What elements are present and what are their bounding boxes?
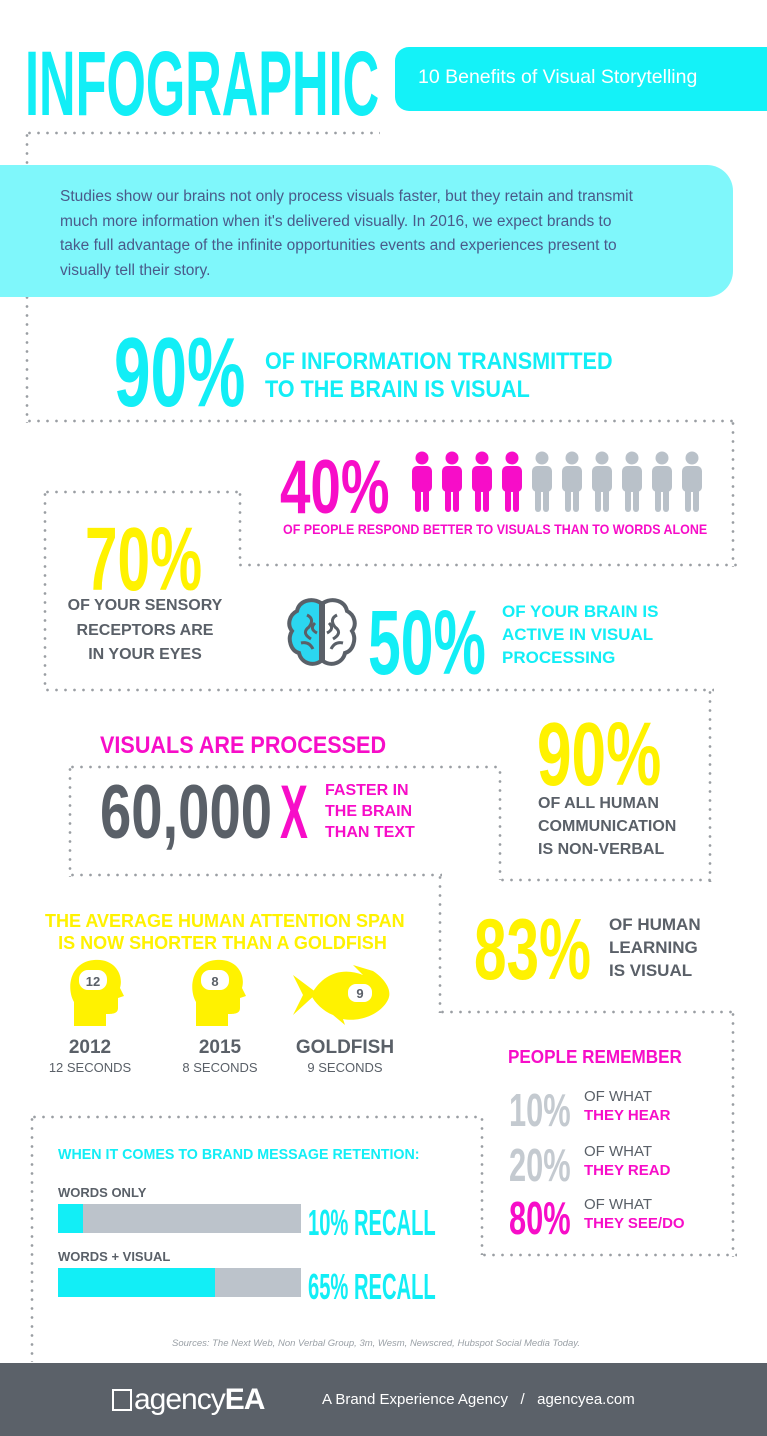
stat 60,000x: X [280, 770, 308, 855]
stat 83% [474, 902, 701, 998]
intro panel [0, 165, 733, 297]
stat 40% people [280, 445, 707, 537]
heading: attention span [45, 911, 405, 953]
stat 90% information [114, 317, 613, 427]
icon: goldfish: 9 SECONDS [307, 1060, 383, 1075]
intro panel: Studies show our brains not only process visuals faster, but they retain and transmit [60, 188, 633, 205]
people icons [412, 452, 702, 512]
icon: head 2015: 8 SECONDS [182, 1060, 258, 1075]
stat 50%: ACTIVE IN VISUAL [502, 625, 653, 644]
stat 60,000x [100, 770, 415, 855]
icon: goldfish [293, 965, 394, 1075]
panel: people remember: THEY SEE/DO [584, 1215, 685, 1232]
stat 60,000x: FASTER IN [325, 782, 409, 799]
icon: goldfish: GOLDFISH [296, 1037, 394, 1058]
footer [0, 1363, 767, 1436]
panel: people remember: 10% [509, 1084, 571, 1136]
stat 83%: 83% [474, 902, 591, 998]
icon: head 2015: 8 [211, 974, 219, 989]
stat 83%: LEARNING [609, 938, 698, 957]
stat 50%: PROCESSING [502, 648, 615, 667]
stat 70%: IN YOUR EYES [88, 646, 202, 663]
heading: visuals are processed: VISUALS ARE PROCESSED [100, 732, 386, 759]
stat 60,000x: 60,000 [100, 770, 272, 855]
panel: people remember: OF WHAT [584, 1143, 652, 1160]
stat 90% information: OF INFORMATION TRANSMITTED [265, 348, 613, 375]
stat 90% non-verbal [537, 705, 676, 858]
intro panel: visually tell their story. [60, 262, 210, 278]
panel: people remember: OF WHAT [584, 1196, 652, 1213]
panel: people remember [508, 1047, 685, 1244]
icon: head 2012: 2012 [69, 1037, 111, 1058]
panel: people remember: PEOPLE REMEMBER [508, 1047, 682, 1067]
bar chart: recall: 10% RECALL [308, 1202, 436, 1243]
heading: attention span: THE AVERAGE HUMAN ATTENTION SPAN [45, 911, 405, 931]
intro panel: take full advantage of the infinite opportunities events and experiences present to [60, 237, 617, 254]
stat 90% non-verbal: OF ALL HUMAN [538, 795, 659, 812]
stat 83%: IS VISUAL [609, 961, 692, 980]
panel: people remember: 80% [509, 1192, 571, 1244]
panel: people remember: 20% [509, 1139, 571, 1191]
stat 70%: RECEPTORS ARE [77, 622, 213, 638]
stat 40% people: 40% [280, 445, 390, 530]
panel: people remember: OF WHAT [584, 1088, 652, 1105]
stat 60,000x: THAN TEXT [325, 824, 415, 841]
bar chart: recall: 65% RECALL [308, 1266, 436, 1307]
icon: head 2015 [182, 960, 258, 1075]
panel: people remember: THEY HEAR [584, 1107, 670, 1124]
stat 90% information: TO THE BRAIN IS VISUAL [265, 376, 530, 403]
stat 70%: 70% [85, 510, 202, 610]
icon: head 2012: 12 SECONDS [49, 1060, 131, 1075]
stat 70%: OF YOUR SENSORY [68, 597, 222, 614]
subtitle banner [395, 47, 767, 111]
stat 50%: OF YOUR BRAIN IS [502, 602, 658, 621]
sources: Sources: The Next Web, Non Verbal Group, 3m, Wesm, Newscred, Hubspot Social Media Today. [172, 1338, 580, 1349]
intro panel: much more information when it's delivered visually. In 2016, we expect brands to [60, 212, 611, 230]
footer: A Brand Experience Agency / agencyea.com [322, 1391, 635, 1408]
heading: brand retention: WHEN IT COMES TO BRAND MESSAGE RETENTION: [58, 1146, 420, 1163]
title: INFOGRAPHIC [25, 33, 379, 135]
logo: agencyEA [134, 1383, 264, 1416]
stat 40% people: OF PEOPLE RESPOND BETTER TO VISUALS THAN TO WORDS ALONE [283, 521, 707, 537]
icon: head 2015: 2015 [199, 1037, 241, 1058]
stat 90% non-verbal: 90% [537, 705, 661, 805]
stat 90% non-verbal: IS NON-VERBAL [538, 841, 664, 858]
stat 70% [68, 510, 222, 663]
stat 90% information: 90% [114, 317, 245, 427]
heading: attention span: IS NOW SHORTER THAN A GOLDFISH [58, 933, 387, 953]
stat 50% [368, 592, 658, 694]
panel: people remember: THEY READ [584, 1162, 670, 1179]
icon: head 2012 [49, 960, 131, 1075]
stat 50%: 50% [368, 592, 486, 694]
stat 60,000x: THE BRAIN [325, 803, 412, 820]
icon: goldfish: 9 [356, 986, 364, 1001]
icon: brain [287, 598, 357, 666]
bar chart: recall [58, 1185, 436, 1307]
subtitle banner: 10 Benefits of Visual Storytelling [418, 66, 697, 88]
stat 90% non-verbal: COMMUNICATION [538, 818, 676, 835]
bar chart: recall: WORDS + VISUAL [58, 1249, 170, 1264]
stat 83%: OF HUMAN [609, 915, 701, 934]
icon: head 2012: 12 [86, 974, 100, 989]
bar chart: recall: WORDS ONLY [58, 1185, 146, 1200]
